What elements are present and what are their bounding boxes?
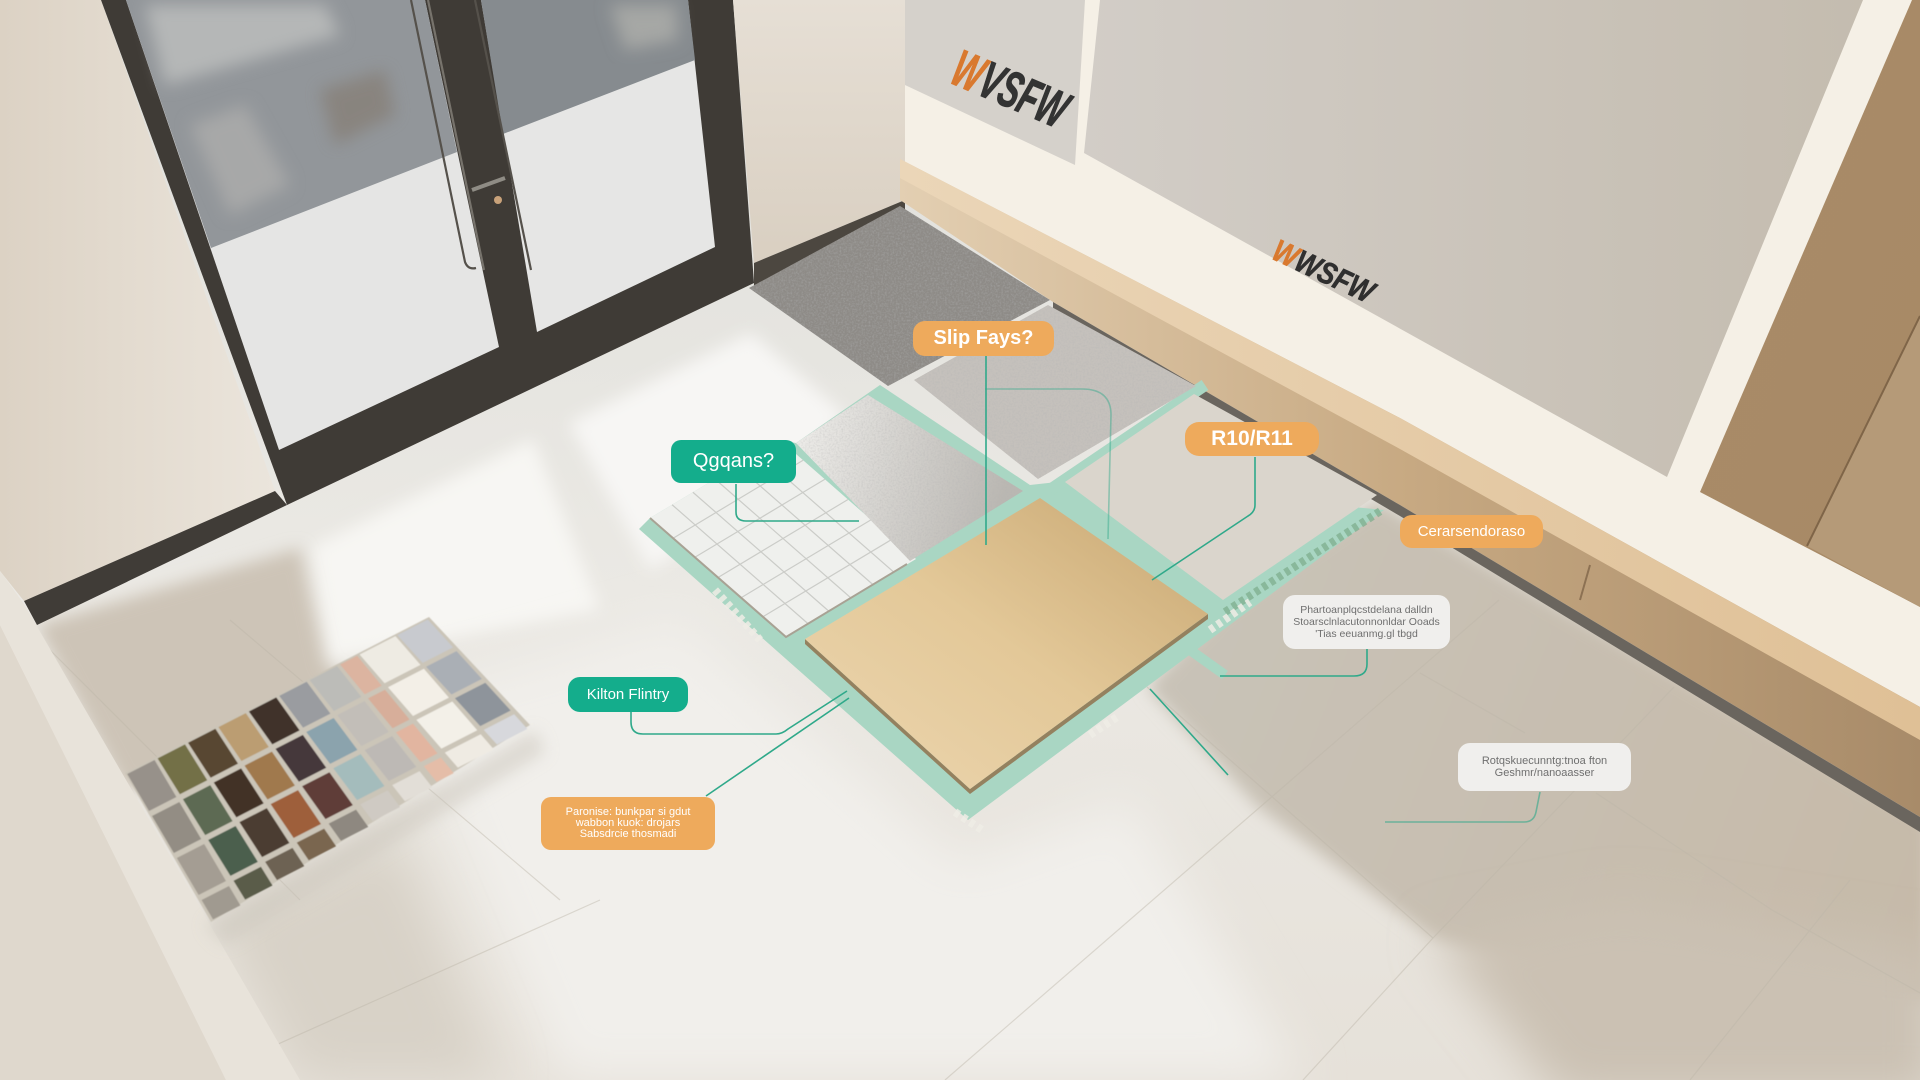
label: Ceramic: Cerarsendoraso: [1418, 523, 1525, 540]
callout: orange note: Sabsdrcie thosmadi: [580, 828, 676, 840]
label: R10/R11: [1185, 422, 1319, 456]
callout: white note one: Stoarsclnlacutonnonldar Ooads: [1293, 616, 1440, 628]
tile: dark gray: [749, 206, 1050, 386]
callout: white note one: 'Tias eeuanmg.gl tbgd: [1315, 628, 1418, 640]
leader: orange callout: [706, 698, 849, 796]
tile: light speckle: [914, 305, 1196, 479]
lower left wall: [0, 571, 300, 1080]
callout: orange note: [541, 797, 715, 850]
leader: white callout one: [1220, 648, 1367, 676]
logo top: WVSFW: [943, 40, 1079, 141]
leader: Slip Fays: [985, 355, 987, 545]
leader: Qgqans: [736, 484, 859, 521]
label: Qgqans: Qgqans?: [693, 450, 774, 472]
wooden bench: [900, 159, 1920, 832]
callout: white note one: [1283, 595, 1450, 649]
leader: white callout two: [1385, 792, 1540, 822]
logo lower: WWSFW: [1267, 233, 1382, 311]
callout: orange note: wabbon kuok: drojars: [576, 817, 680, 829]
mint base: [639, 385, 1384, 820]
mortar marks: [715, 510, 1382, 832]
callout: white note two: Rotqskuecunntg:tnoa fton: [1482, 755, 1607, 767]
label: R10/R11: R10/R11: [1211, 427, 1293, 450]
callout: white note two: Geshmr/nanoaasser: [1495, 767, 1594, 779]
leader lines: [631, 355, 1540, 822]
callout: orange note: Paronise: bunkpar si gdut: [566, 806, 690, 818]
tile: gray fade: [796, 395, 1023, 561]
left wall: [0, 0, 287, 625]
label: Slip Fays: [913, 321, 1054, 356]
leader: R10/R11: [1152, 457, 1255, 580]
glass door: [101, 0, 754, 505]
door handle: [411, 0, 531, 270]
wood wall panel: [1700, 0, 1920, 607]
leader: Kiln: [631, 691, 847, 734]
label: Kiln: Kilton Flintry: [587, 686, 669, 703]
sample tile board: [639, 206, 1384, 832]
door side wall: [733, 0, 905, 287]
label: Qgqans: [671, 440, 796, 483]
leader: pale curve: [985, 389, 1111, 539]
callout: white note one: Phartoanplqcstdelana dalldn: [1300, 604, 1433, 616]
callout: white note two: [1458, 743, 1631, 791]
tile: sand: [805, 498, 1208, 794]
label: Ceramic: [1400, 515, 1543, 548]
tile: white grid: [650, 440, 916, 637]
tile: cream: [1065, 394, 1377, 600]
label: Kiln: [568, 677, 688, 712]
leader: tile diagonal: [1150, 689, 1228, 775]
colour swatch palette: [125, 617, 545, 945]
label: Slip Fays: Slip Fays?: [933, 327, 1034, 349]
back wall panels: [905, 0, 1920, 830]
